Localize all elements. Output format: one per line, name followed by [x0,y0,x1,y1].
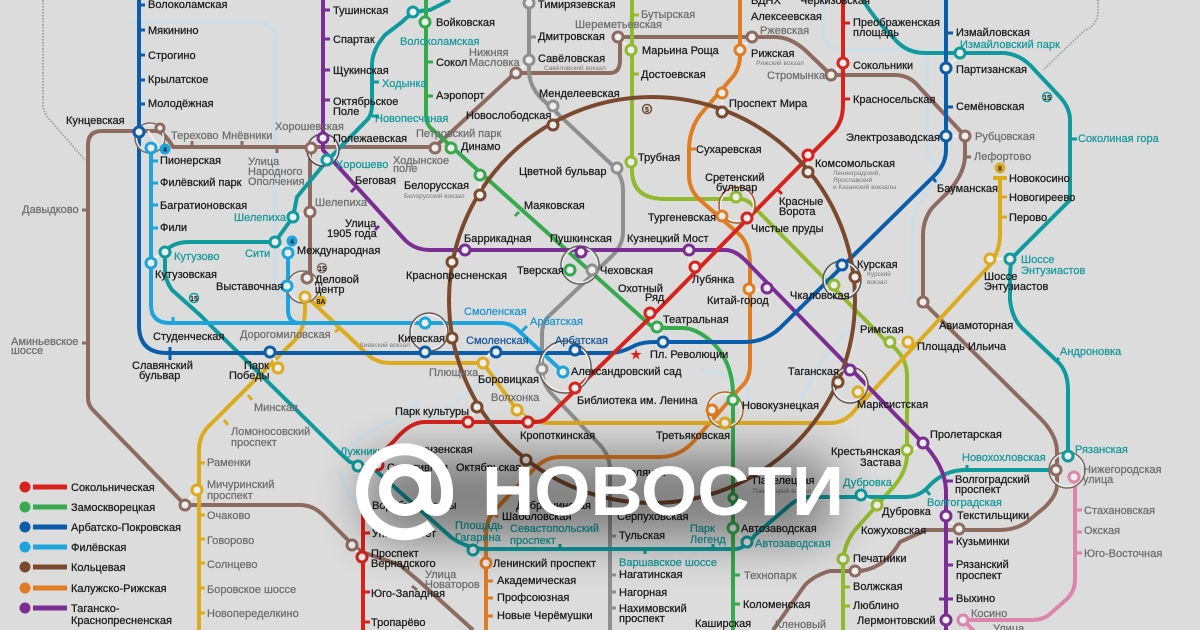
interchange stations [146,0,1015,625]
station names: black: Энтузиастов [984,281,1048,293]
legend: line 7: Таганско- [71,603,120,615]
station names: black: Выставочная [216,281,283,293]
station names: black: Краснопресненская [406,270,507,282]
station names: black: Тропарёво [371,617,425,629]
line number badges [160,92,1052,306]
station names: black: Тульская [619,530,665,542]
station names: grey (suburban diameters): Масловка [469,57,520,69]
station names: teal (big circle line): Лужники [340,446,384,458]
station names: grey (suburban diameters): Народного [248,166,303,178]
station names: black: Шаболовская [502,511,571,523]
station names: black: Преображенская [853,17,940,29]
station names: grey (suburban diameters): Бутырская [641,9,695,21]
station names: grey (suburban diameters): Очаково [207,510,250,522]
dotted outer rail lines [43,0,1098,160]
station names: grey (suburban diameters): Юго-Восточная [1084,548,1162,560]
station names: grey (suburban diameters): улица [1083,474,1114,486]
station names: teal (big circle line): Шоссе [1021,254,1054,266]
railway terminal notes: Киевский вокзал [360,341,410,349]
station names: black: Выхино [956,593,995,605]
station names: teal (big circle line) [174,36,1160,569]
station names: black: Фили [160,222,187,234]
station names: grey (suburban diameters): Косино [971,608,1007,620]
station names: black: Крестьянская [831,446,901,458]
legend: line 7 [20,602,172,627]
railway terminal notes: Белорусский вокзал [404,192,465,200]
station names: teal (big circle line): Сити [245,248,270,260]
station names: teal (big circle line): Энтузиастов [1021,265,1085,277]
station names: grey (suburban diameters): Боровское шоссе [207,584,296,596]
line number badges: 15 [190,296,198,303]
station names: black: Савёловская [538,53,605,65]
station names: black: Серпуховская [617,511,689,523]
icon: at sign [362,449,447,534]
station names: black: Международная [297,245,380,257]
railway terminal notes: Павелецкий вокзал [753,487,812,495]
station names: black: Юго-Западная [371,588,445,600]
station names: black: Библиотека им. Ленина [577,395,698,407]
station names: teal (big circle line): Гагарина [455,532,502,544]
station names: dark blue: Смоленская [466,335,529,347]
station names: grey (suburban diameters): шоссе [11,345,43,357]
station names: grey (suburban diameters): Новаторов [425,579,480,591]
station names: light blue [464,306,583,328]
station names: black: бульвар [716,182,757,194]
station names: black: Строгино [148,50,196,62]
station names: black: Волжская [853,581,903,593]
station names: black: 1905 года [327,228,378,240]
station names: black: Спартак [333,34,375,46]
station names: grey (suburban diameters): Рубцовская [975,131,1035,143]
railway terminal notes: Ленинградский, [833,169,880,177]
legend: line 4: Филёвская [71,542,126,554]
station names: black: Щукинская [333,65,389,77]
station names: black: Маяковская [524,200,585,212]
railway terminal notes: Рижский вокзал [756,59,804,67]
station names: black: Кунцевская [66,115,125,127]
legend: line 1 [20,482,155,494]
station names: black: Улица [345,218,377,230]
station names: teal (big circle line): Кутузово [174,251,219,263]
station names: grey (suburban diameters): проспект [207,490,253,502]
station names: black: Партизанская [956,64,1027,76]
station names: dark blue: Арбатская [555,335,608,347]
station names: teal (big circle line): Волгоградская [927,497,1002,509]
station names: teal (big circle line): Севастопольский [510,523,599,535]
station names: black: Дмитровская [538,31,605,43]
station names: black: Лубянка [692,274,735,286]
line number badges: 4 [163,147,167,154]
station names: black: Кузнецкий Мост [627,233,709,245]
station names: black: Измайловская [956,27,1030,39]
station names: black: Люблино [853,600,899,612]
station names: black: Багратионовская [160,200,247,212]
station names: black: Добрынинская [516,500,591,512]
wordmark: НОВОСТИ [482,452,844,530]
station names: black: Римская [860,324,904,336]
station names: black: Академическая [497,575,576,587]
line number badges: 8A [317,299,325,306]
line number badges: 8 [998,166,1002,173]
station names: black: Парк [244,360,269,372]
station names: black: Курская [857,259,898,271]
legend [20,482,181,627]
station names: grey (suburban diameters): проспект [231,437,277,449]
station names: teal (big circle line): Ходынка [382,78,428,90]
line: purple 7 [323,0,946,630]
station names: black: Рижская [751,48,795,60]
legend: line 2: Замоскворецкая [71,502,155,514]
station names: grey (suburban diameters): Солнцево [207,559,257,571]
station names: grey (suburban diameters): Мнёвники [222,130,272,142]
station names: black: Пролетарская [930,429,1002,441]
station names: grey (suburban diameters): поле [393,163,417,175]
station names: black: Вернадского [371,558,436,570]
railway terminal notes: вокзал [867,279,888,286]
station names: black: Цветной бульвар [519,166,606,178]
line number badges: 4 [290,239,294,246]
dark vignette behind logo [365,455,835,540]
station names: black: Трубная [638,152,680,164]
station names: black: бульвар [139,370,180,382]
station names: teal (big circle line): Площадь [455,520,503,532]
station names: black: Павелецкая [753,475,815,487]
station names: black: Полежаевская [333,133,407,145]
station names: black: Пушкинская [550,233,612,245]
station names: black: Дубровка [882,506,932,518]
station names: grey (suburban diameters): Стромынка [767,70,826,82]
station names: black: Ряд [645,292,665,304]
station names: black: Поле [333,106,359,118]
station names: black: Боровицкая [478,374,539,386]
station names: teal (big circle line): Шелепиха [234,212,287,224]
station names: black: Тургеневская [648,212,716,224]
station names: black: Сокол [436,57,467,69]
station names: black: Кожуховская [861,525,926,537]
legend: line 6: Калужско-Рижская [71,583,167,595]
station names: grey (suburban diameters): Лефортово [974,151,1031,163]
line: blue 3 [139,0,946,353]
station names: black: Парк культуры [395,406,469,418]
legend: line 1: Сокольническая [71,482,155,494]
station names: black: Новослободская [466,110,551,122]
station names: grey (suburban diameters): Улица [248,156,280,168]
station names: black: Университет [372,528,436,540]
station names: teal (big circle line): Дубровка [843,477,893,489]
station names: black: Новокузнецкая [742,400,819,412]
station names: black: Алексеевская [751,11,822,23]
river and pale background strokes [128,0,943,510]
station names: black: Полянка [622,467,666,479]
station names: grey (suburban diameters): Минская [254,402,298,414]
station names: grey (suburban diameters): Давыдково [22,204,79,216]
line: red 1 [363,0,843,630]
station names: grey (suburban diameters): Ломоносовский [231,426,310,438]
station names: black: Сретенский [705,172,765,184]
station names: grey (suburban diameters): Окская [1084,525,1120,537]
station names: grey (suburban diameters): Дорогомиловская [240,329,331,341]
station names: light blue: Смоленская [464,306,527,318]
line: pink 15 [963,475,1075,630]
station names: black: Китай-город [707,295,769,307]
station names: black: Сухаревская [696,144,762,156]
station names: black: Проспект [371,548,419,560]
station names: black: Марьина Роща [642,45,720,57]
station names: black: Чеховская [600,265,653,277]
station names: black: Коломенская [743,599,810,611]
station names: grey (suburban diameters): Новопеределкино [207,608,299,620]
station names: grey (suburban diameters): Улица [425,569,457,581]
station names: black: Театральная [663,314,729,326]
station names: black: Деловой [315,274,359,286]
legend: line 4 [20,542,126,554]
station names: black: Тверская [517,265,564,277]
logo: Новости [362,449,844,534]
station names: black: Новокосино [1009,173,1070,185]
station names: black: Октябрьская [456,462,521,474]
station names: teal (big circle line): Рязанская [1075,444,1128,456]
station names: black: Красные [779,196,823,208]
station names: black: Октябрьское [333,96,398,108]
railway terminal notes: Ярославский [833,176,873,184]
station names: grey (suburban diameters): Терехово [171,130,219,142]
station names: black: Рязанский [956,559,1009,571]
station names: black: Александровский сад [571,366,682,378]
railway terminal notes: Савёловский вокзал [544,64,606,72]
station names: teal (big circle line): Соколиная гора [1078,133,1160,145]
station names: black: Каширская [695,618,751,630]
station names: grey (suburban diameters): Аминьевское [11,336,78,348]
hub stations [134,124,1079,482]
line: yellow 8 [199,178,1007,630]
station names: grey (suburban diameters): Мичуринский [207,479,274,491]
legend: line 3: Арбатско-Покровская [71,522,181,534]
icon: Kremlin star [630,349,642,360]
legend: line 3 [20,522,181,534]
station names: black: Беговая [355,175,396,187]
station names: grey (suburban diameters): Нижегородская [1083,464,1162,476]
station names: black: Бауманская [937,183,998,195]
station names: grey (suburban diameters): Ополчения [248,176,305,188]
station names: black: Киевская [398,333,445,345]
station names: black: Фрунзенская [407,444,473,456]
station names: black: Текстильщики [957,510,1029,522]
station names: black: Крылатское [148,74,208,86]
station names: grey (suburban diameters): Плющиха [429,367,479,379]
station names: black: площадь [853,27,899,39]
station names: black: Кутузовская [155,269,217,281]
station names: grey (suburban diameters): Стахановская [1084,505,1155,517]
station names: black: Печатники [853,553,906,565]
station names: black: Пионерская [160,155,221,167]
station names: black: Спортивная [387,462,448,474]
station names: black: Баррикадная [464,233,531,245]
station names: grey (suburban diameters): Говорово [207,535,254,547]
station names: teal (big circle line): Андроновка [1060,346,1122,358]
legend: line 6 [20,582,167,595]
station names: black: Перово [1009,212,1047,224]
station names: black: Пл. Революции [650,349,728,361]
station names: teal (big circle line): Легенд [690,534,726,546]
station names: black: Тушинская [333,5,388,17]
line: lime 10 [632,0,907,630]
station names: black: Ворота [779,206,816,218]
legend: line 2 [20,502,155,514]
line: cyan 4 [151,148,563,372]
station names: teal (big circle line): Новохохловская [962,452,1046,464]
station names: black: Воробьёвы горы [372,500,457,512]
station names: black: Электрозаводская [846,132,940,144]
station names: black: Мякинино [148,25,198,37]
station names: teal (big circle line): Измайловский парк [960,39,1060,51]
station names: black: Менделеевская [539,88,620,100]
station names: black: Белорусская [404,180,469,192]
station names: dark blue [466,335,608,347]
line number badges: 15 [1043,95,1051,102]
line number badges: 15 [318,266,326,273]
station names: black: центр [315,284,345,296]
station names: black: Шоссе [984,271,1017,283]
line number badges: 5 [645,107,649,114]
line: teal 11 [165,0,1070,549]
station names: teal (big circle line): проспект [510,535,556,547]
station names: teal (big circle line): Волоколамская [400,36,479,48]
station names: black: Кузьминки [956,536,1009,548]
station names: grey (suburban diameters): Петровский парк [416,128,502,140]
station names: black: Площадь Ильича [917,341,1007,353]
station names: grey (suburban diameters): Шелепиха [315,197,368,209]
station names: grey (suburban diameters): Волхонка [491,392,540,404]
legend: line 5 [20,562,126,574]
hub rings [136,124,1084,487]
railway terminal notes: и Казанский вокзалы [833,183,896,191]
station names: black: Профсоюзная [497,592,569,604]
station names: teal (big circle line): Автозаводская [755,538,831,550]
station names: black: Сокольники [853,60,913,72]
station names: black: Аэропорт [436,90,484,102]
station names: grey (suburban diameters): Технопарк [744,570,797,582]
station names: black: Новые Черёмушки [497,610,593,622]
line: orange 6 [486,0,750,630]
station names: black: проспект [956,570,1002,582]
station names: black: Войковская [436,17,495,29]
station names: black: Нахимовский [619,603,687,615]
line: grey 9 [529,0,623,630]
interchange connectors [148,12,1010,566]
station names: black: Охотный [618,283,663,295]
line: brown ring 5 [449,97,855,503]
station names: black: Волгоградский [955,474,1030,486]
railway terminal notes [360,59,896,495]
line: D grey-brown diameters [88,37,1057,630]
station names: black: Победы [229,370,269,382]
station names: black: Третьяковская [656,430,730,442]
station names: black: Застава [860,457,902,469]
station names: black: Марксистская [857,399,928,411]
station names: black: Филёвский парк [160,177,242,189]
line: green 2 [426,0,733,630]
station names: grey (suburban diameters): Хорошевская [275,121,344,133]
station names: black: Авиамоторная [939,320,1013,332]
station names: grey (suburban diameters): Нижняя [469,47,508,59]
station names: black: Студенческая [153,331,224,343]
station names: grey (suburban diameters): Ржевская [760,25,809,37]
station names: black: Чистые пруды [751,223,824,235]
legend: line 7: Краснопресненская [71,615,172,627]
station names: black: Достоевская [641,69,706,81]
station names: black: Комсомольская [815,158,895,170]
station names: black: Новогиреево [1009,192,1075,204]
station names: black: Ленинский проспект [493,558,596,570]
station names: black: Красносельская [853,94,935,106]
station names: black: Автозаводская [741,523,817,535]
station names: black: Нагорная [619,587,667,599]
station names: black: Лермонтовский [857,615,936,627]
legend: line 5: Кольцевая [71,562,126,574]
station names: grey (suburban diameters): Раменки [207,457,251,469]
station names: black: Молодёжная [148,98,214,110]
station names: black: Таганская [788,366,839,378]
railway terminal notes: Курский [867,270,891,278]
station names: teal (big circle line): Новопесчаная [375,113,448,125]
station names: black: Динамо [461,141,500,153]
station names: light blue: Арбатская [530,316,583,328]
station names: black: Нагатинская [619,569,683,581]
station names: teal (big circle line): Хорошево [336,159,388,171]
station names: black: Славянский [132,360,193,372]
station names: teal (big circle line): Варшавское шоссе [619,557,717,569]
station names: black: Кропоткинская [520,430,595,442]
station names: grey (suburban diameters): Шереметьевская [575,19,662,31]
station names: black: проспект [619,613,665,625]
station names: grey (suburban diameters): Ходынское [393,155,449,167]
station names: black: Проспект Мира [729,98,808,110]
station names: black: Семёновская [956,101,1024,113]
station names: teal (big circle line): Парк [690,523,715,535]
station names: black: Чкаловская [790,290,850,302]
station names: black: проспект [955,484,1001,496]
